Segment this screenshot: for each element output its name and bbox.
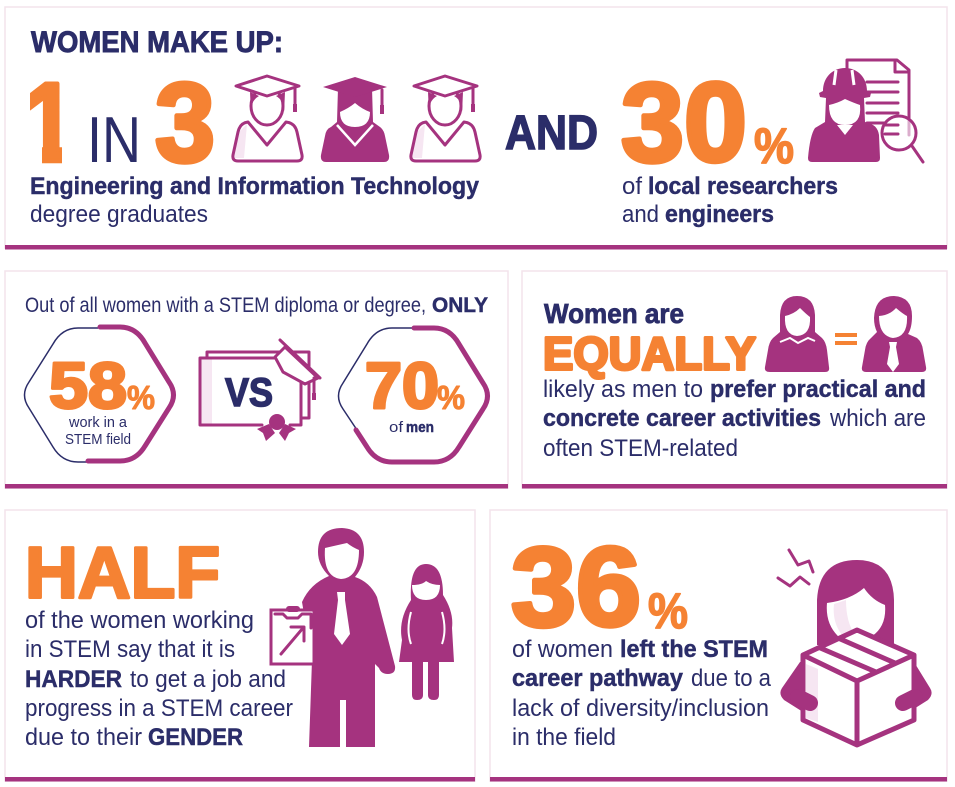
statistic: 30 percent: %	[754, 118, 794, 174]
text: left the pathway: of women	[512, 636, 613, 663]
icon: diploma with VS: VS	[225, 371, 273, 415]
icon: filled graduate	[321, 77, 389, 162]
text: local researchers: engineers	[665, 201, 774, 228]
statistic: 1 in 3	[30, 80, 214, 165]
text: prefer practical activities: likely as men to	[543, 376, 703, 403]
icon: outlined graduate	[233, 76, 302, 161]
text: prefer practical activities: which are	[829, 405, 926, 432]
statistic: 36 percent: %	[648, 583, 688, 639]
heading: women are equally: Women are	[544, 298, 684, 329]
text: harder to progress: in STEM say that it is	[25, 636, 235, 663]
hexagon: 70 percent	[338, 328, 488, 462]
text: prefer practical activities: concrete career activities	[543, 405, 821, 432]
text: left the pathway: due to a	[691, 665, 772, 692]
icon: diploma with VS	[200, 340, 320, 441]
text: left the pathway: in the field	[512, 724, 616, 751]
icon: woman carrying box	[778, 550, 932, 745]
text: engineering graduates	[30, 173, 480, 228]
hexagon: 58 percent	[24, 327, 174, 462]
hexagon: 58 percent: 58	[49, 349, 127, 422]
text: engineering graduates: degree graduates	[30, 201, 208, 228]
heading: women are equally	[543, 298, 756, 380]
panel: equally likely	[522, 271, 947, 488]
text: harder to progress: due to their	[25, 724, 142, 751]
panel: half of women	[5, 510, 475, 782]
icon: man with clipboard	[271, 528, 395, 747]
icon: equals sign	[835, 333, 857, 345]
statistic: 1 in 3: 1	[23, 60, 75, 185]
hexagon: 58 percent: STEM field	[65, 431, 131, 448]
text: left the pathway: left the STEM	[620, 636, 768, 663]
icon: girl	[399, 564, 454, 700]
panel: STEM diploma comparison	[5, 271, 508, 488]
text: prefer practical activities: prefer practical and	[710, 376, 926, 403]
statistic: 36 percent: 36	[511, 524, 641, 650]
text: prefer practical activities: often STEM-related	[543, 435, 738, 462]
panel: women make up	[5, 7, 947, 250]
heading: half: HALF	[25, 534, 220, 614]
text: harder to progress: of the women working	[25, 607, 254, 634]
icon: woman	[765, 296, 829, 372]
text: harder to progress: GENDER	[148, 724, 243, 751]
text: local researchers: of	[622, 173, 642, 200]
heading: out of all women: Out of all women with a STEM diploma or degree,	[25, 294, 426, 317]
statistic: 1 in 3: 3	[155, 60, 215, 185]
text: left the pathway	[512, 636, 772, 751]
text: harder to progress	[25, 607, 293, 751]
hexagon: 70 percent: %	[437, 379, 465, 416]
hexagon: 70 percent: 70	[365, 349, 439, 422]
text: prefer practical activities	[543, 376, 926, 462]
statistic: 30 percent: 30	[621, 60, 747, 185]
text: left the pathway: career pathway	[512, 665, 684, 692]
hexagon: 70 percent: men	[406, 419, 434, 436]
text: harder to progress: to get a job and	[130, 666, 286, 693]
text: local researchers	[622, 173, 838, 228]
text: left the pathway: lack of diversity/inclusion	[512, 695, 769, 722]
hexagon: 70 percent: of	[389, 419, 404, 436]
heading: women make up: WOMEN MAKE UP:	[31, 26, 283, 59]
panel: 36 percent left	[490, 510, 947, 782]
heading: out of all women: ONLY	[432, 294, 488, 317]
icon: outlined graduate right	[411, 76, 480, 161]
hexagon: 58 percent: work in a	[68, 414, 128, 431]
text: local researchers: local researchers	[648, 173, 838, 200]
text: harder to progress: progress in a STEM career	[25, 695, 293, 722]
icon: man	[862, 296, 926, 372]
heading: women are equally: EQUALLY	[543, 328, 756, 380]
label: and: AND	[505, 107, 598, 160]
hexagon: 58 percent: %	[127, 379, 155, 416]
text: local researchers: and	[622, 201, 659, 228]
icon: engineer with document	[808, 60, 923, 162]
text: engineering graduates: Engineering and Information Technology	[30, 173, 480, 200]
text: harder to progress: HARDER	[25, 666, 122, 693]
statistic: 1 in 3: IN	[87, 103, 141, 176]
